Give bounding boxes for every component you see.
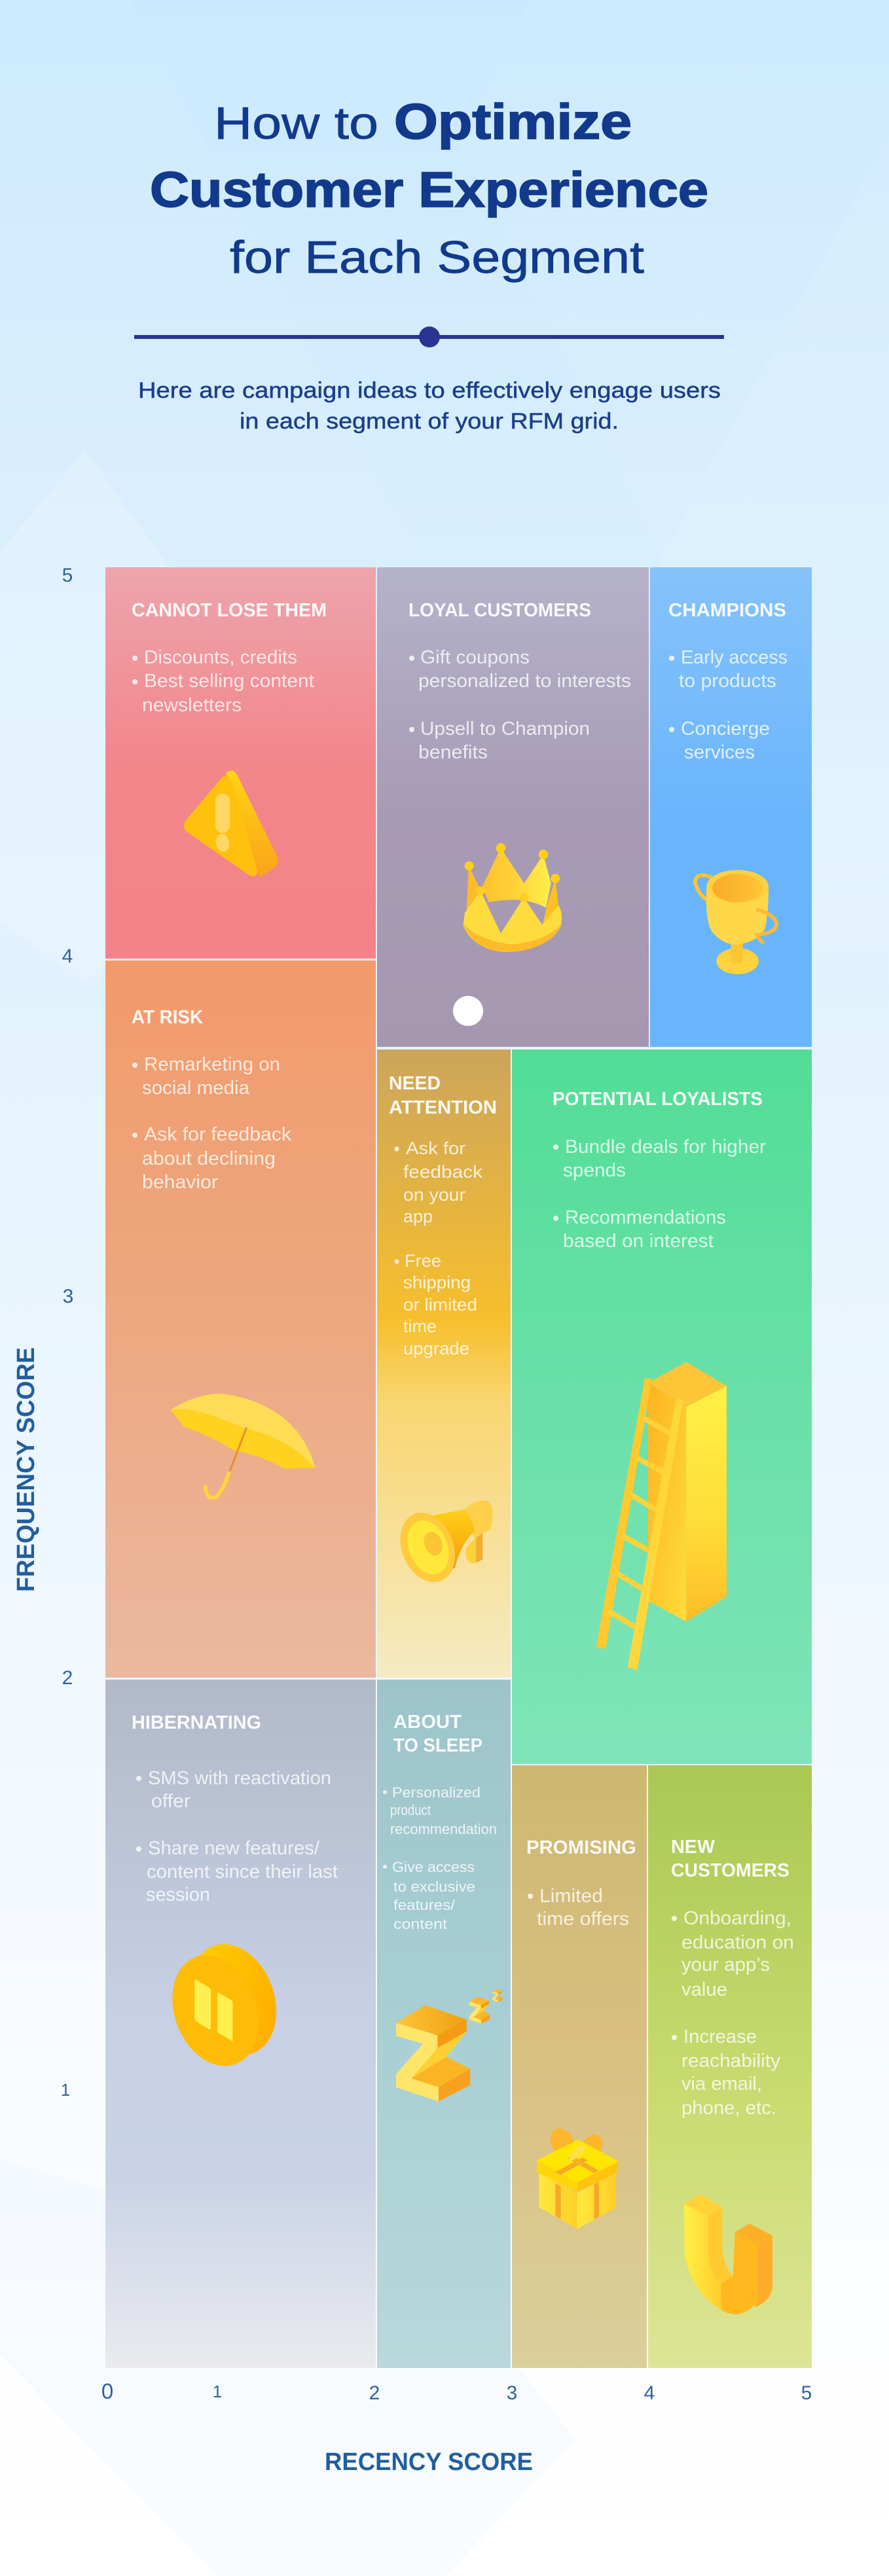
- list: cannot lose them: [132, 647, 314, 716]
- list: champions: [669, 647, 788, 763]
- icon: pause coin: [158, 1932, 291, 2078]
- list: champions: to products: [679, 671, 776, 692]
- x axis label: RECENCY SCORE: [325, 2448, 533, 2476]
- list: champions: services: [684, 742, 755, 763]
- heading: new customers: CUSTOMERS: [671, 1860, 789, 1881]
- x axis numbers: 0: [101, 2379, 113, 2403]
- icon: trophy: [695, 870, 777, 974]
- list: need attention: on your: [403, 1185, 465, 1205]
- subtitle: in each segment of your RFM grid.: [240, 409, 619, 434]
- subtitle: Here are campaign ideas to effectively engage users: [138, 378, 721, 403]
- list: potential loyalists: [553, 1137, 766, 1252]
- list: promising: [528, 1886, 629, 1930]
- list: need attention: feedback: [403, 1162, 483, 1182]
- list: hibernating: content since their last: [147, 1861, 338, 1882]
- list: about to sleep: product: [390, 1802, 431, 1818]
- list: new customers: via email,: [681, 2073, 762, 2094]
- list: cannot lose them: Discounts, credits: [144, 647, 297, 668]
- x axis numbers: 3: [507, 2382, 517, 2404]
- panel: new customers: [648, 1765, 812, 2368]
- x axis numbers: 5: [801, 2382, 812, 2404]
- icon: ladder against a tall box: [596, 1362, 727, 1670]
- title: How to: [214, 97, 378, 149]
- list: potential loyalists: spends: [563, 1160, 626, 1181]
- list: hibernating: [136, 1768, 338, 1905]
- icon: sleeping z letters: [396, 1989, 503, 2102]
- list: new customers: your app’s: [681, 1954, 770, 1975]
- heading: need attention: ATTENTION: [389, 1097, 497, 1118]
- list: need attention: [394, 1138, 483, 1358]
- list: need attention: shipping: [403, 1273, 471, 1292]
- y axis numbers: 2: [62, 1667, 73, 1689]
- x axis numbers: 4: [644, 2382, 655, 2404]
- list: about to sleep: features/: [393, 1897, 456, 1913]
- list: loyal customers: benefits: [418, 742, 488, 763]
- title: [150, 94, 708, 283]
- list: hibernating: offer: [151, 1791, 190, 1812]
- heading: cannot lose them: CANNOT LOSE THEM: [132, 600, 327, 621]
- x axis numbers: 1: [213, 2382, 222, 2401]
- list: loyal customers: personalized to interests: [418, 671, 631, 692]
- list: promising: time offers: [537, 1909, 629, 1930]
- y axis numbers: 3: [63, 1286, 73, 1307]
- heading: new customers: [671, 1837, 789, 1881]
- panel: champions: [650, 567, 812, 1047]
- list: at risk: [132, 1054, 292, 1193]
- list: need attention: upgrade: [403, 1339, 469, 1358]
- icon: gift box: [537, 2124, 619, 2229]
- list: about to sleep: Personalized: [392, 1784, 481, 1801]
- heading: about to sleep: TO SLEEP: [393, 1735, 482, 1756]
- panel: need attention: [377, 1050, 511, 1678]
- icon: megaphone: [390, 1500, 493, 1591]
- panel: about to sleep: [377, 1680, 511, 2368]
- list: need attention: app: [403, 1207, 433, 1226]
- list: new customers: phone, etc.: [681, 2098, 776, 2119]
- heading: loyal customers: LOYAL CUSTOMERS: [408, 600, 591, 621]
- title: Optimize: [394, 94, 632, 150]
- list: about to sleep: [383, 1784, 497, 1932]
- y axis numbers: 1: [61, 2080, 70, 2100]
- y axis numbers: 5: [62, 565, 73, 586]
- list: need attention: or limited: [403, 1295, 477, 1314]
- list: need attention: time: [403, 1316, 437, 1336]
- list: new customers: Increase: [683, 2026, 757, 2047]
- panel: potential loyalists: [512, 1050, 812, 1764]
- icon: umbrella: [170, 1392, 316, 1498]
- list: champions: Concierge: [681, 718, 770, 739]
- heading: promising: PROMISING: [526, 1837, 636, 1858]
- list: about to sleep: content: [393, 1916, 447, 1932]
- y axis label: FREQUENCY SCORE: [12, 1347, 40, 1592]
- list: new customers: reachability: [681, 2051, 781, 2072]
- list: new customers: Onboarding,: [683, 1908, 791, 1929]
- heading: hibernating: HIBERNATING: [132, 1712, 261, 1733]
- heading: about to sleep: [393, 1712, 482, 1756]
- list: potential loyalists: based on interest: [563, 1231, 714, 1252]
- list: loyal customers: Upsell to Champion: [420, 718, 590, 739]
- list: promising: Limited: [539, 1886, 603, 1907]
- icon: crown: [463, 843, 562, 952]
- list: new customers: [672, 1908, 794, 2119]
- list: about to sleep: Give access: [392, 1859, 475, 1875]
- x axis numbers: [101, 2379, 812, 2404]
- list: at risk: about declining: [142, 1148, 276, 1169]
- panel: promising: [512, 1765, 647, 2368]
- list: hibernating: SMS with reactivation: [148, 1768, 331, 1789]
- title: for Each Segment: [230, 232, 644, 283]
- panel: hibernating: [105, 1680, 376, 2368]
- icon: magnet letter u: [684, 2194, 772, 2314]
- list: at risk: behavior: [142, 1172, 218, 1193]
- heading: need attention: [389, 1073, 497, 1118]
- heading: at risk: AT RISK: [132, 1007, 203, 1028]
- subtitle: [138, 378, 721, 434]
- heading: potential loyalists: POTENTIAL LOYALISTS: [553, 1089, 763, 1110]
- list: new customers: education on: [681, 1932, 794, 1953]
- list: about to sleep: recommendation: [390, 1821, 497, 1837]
- list: cannot lose them: newsletters: [142, 695, 242, 716]
- list: at risk: Ask for feedback: [144, 1124, 292, 1145]
- list: new customers: value: [681, 1979, 727, 2000]
- icon: warning triangle: [187, 770, 278, 877]
- list: need attention: Ask for: [406, 1138, 465, 1158]
- panel: cannot lose them: [105, 567, 376, 959]
- list: hibernating: Share new features/: [148, 1838, 320, 1859]
- heading: champions: CHAMPIONS: [668, 600, 786, 621]
- heading: about to sleep: ABOUT: [393, 1712, 462, 1733]
- list: need attention: Free: [405, 1251, 441, 1271]
- list: at risk: social media: [142, 1078, 250, 1099]
- title: Customer Experience: [150, 162, 708, 218]
- white dot: [453, 996, 483, 1026]
- list: potential loyalists: Recommendations: [565, 1207, 726, 1228]
- list: champions: Early access: [681, 647, 788, 668]
- divider with dot: [134, 326, 724, 347]
- list: cannot lose them: Best selling content: [144, 671, 314, 692]
- y axis numbers: [61, 565, 73, 2100]
- panel: at risk: [105, 961, 376, 1678]
- panel: loyal customers: [377, 567, 649, 1047]
- list: loyal customers: Gift coupons: [420, 647, 530, 668]
- list: potential loyalists: Bundle deals for higher: [565, 1137, 766, 1157]
- list: loyal customers: [409, 647, 631, 763]
- y axis numbers: 4: [62, 945, 73, 967]
- heading: new customers: NEW: [671, 1837, 716, 1858]
- list: at risk: Remarketing on: [144, 1054, 280, 1075]
- list: hibernating: session: [146, 1884, 210, 1905]
- x axis numbers: 2: [369, 2382, 380, 2404]
- heading: need attention: NEED: [389, 1073, 441, 1094]
- list: about to sleep: to exclusive: [393, 1879, 475, 1895]
